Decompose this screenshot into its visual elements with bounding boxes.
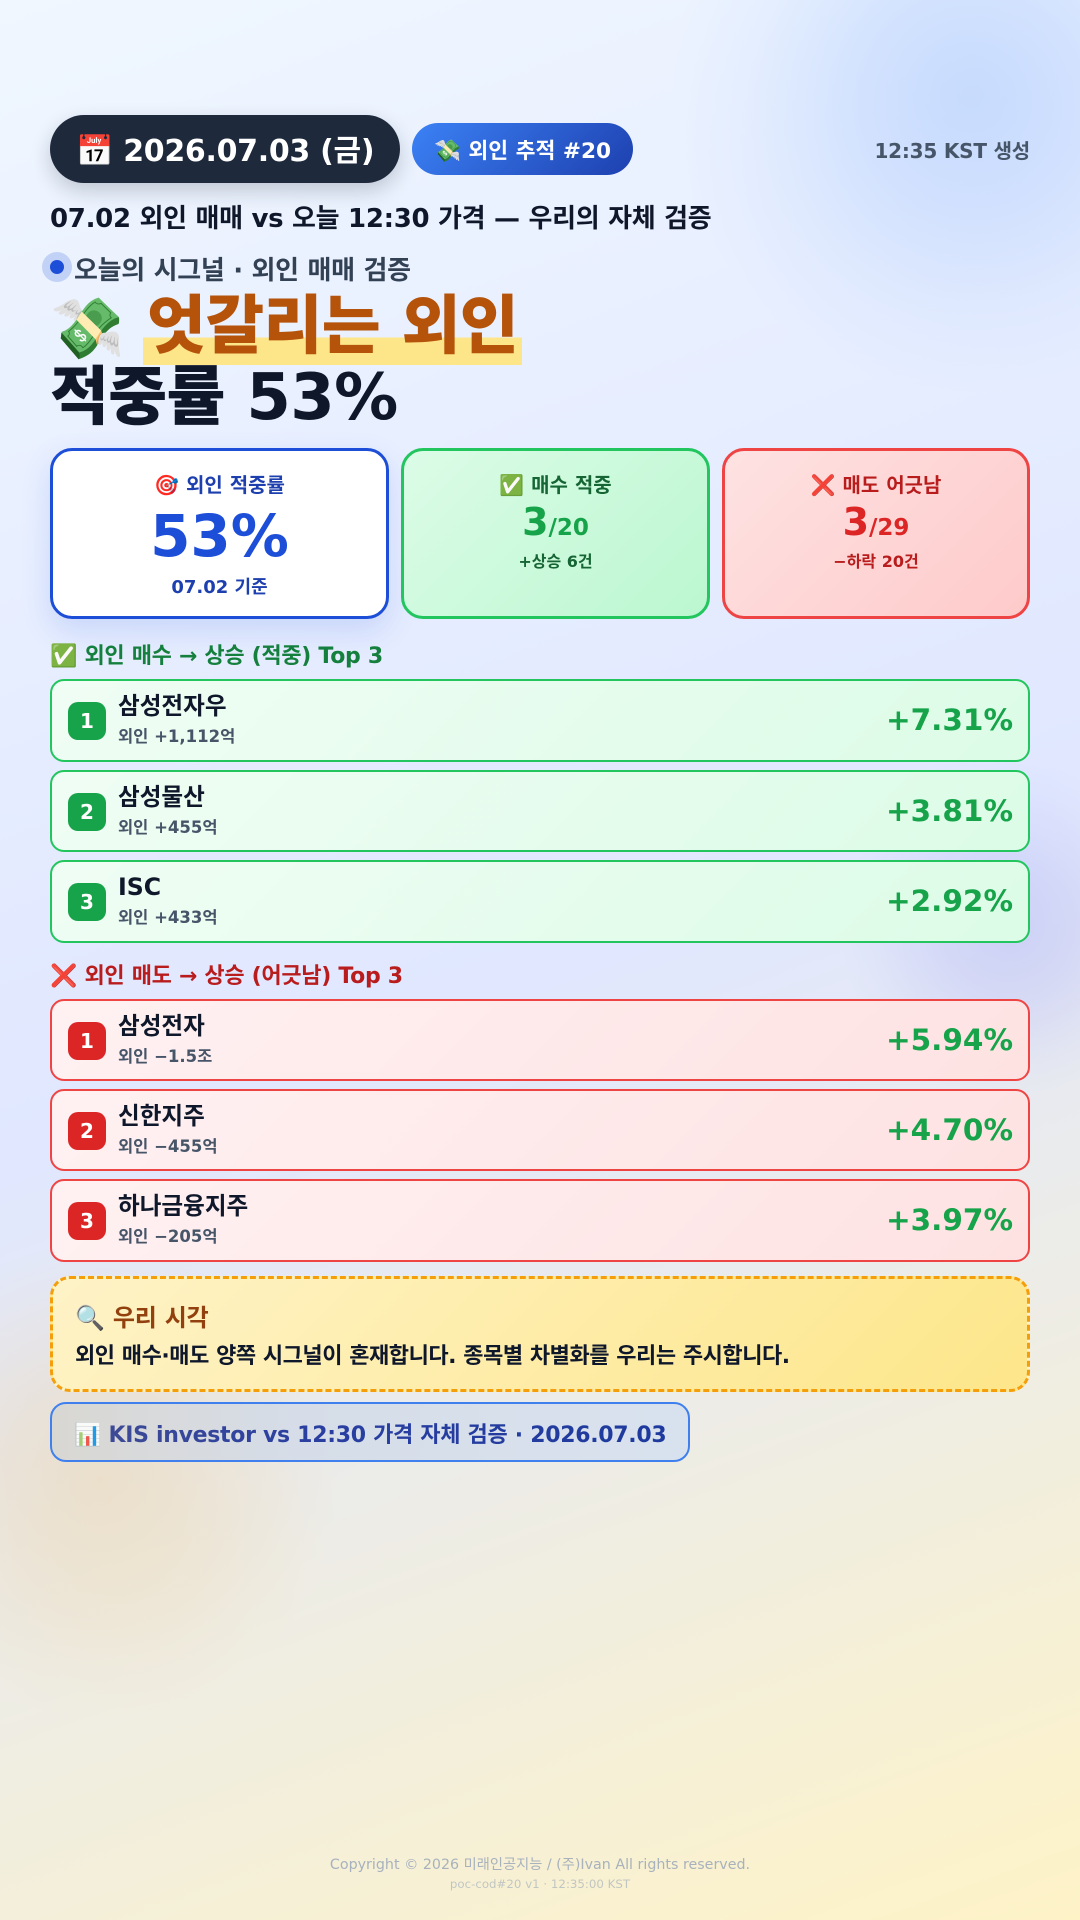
row: buy 3: +2.92%	[886, 884, 1013, 918]
row: sell 3: 3	[80, 1209, 94, 1233]
row: sell 2	[50, 1089, 1030, 1171]
section heading: sell misses: ❌ 외인 매도 → 상승 (어긋남) Top 3	[50, 964, 403, 989]
section heading: buy hits: ✅ 외인 매수 → 상승 (적중) Top 3	[50, 644, 383, 669]
KPI label: 🎯 외인 적중률	[154, 473, 285, 497]
row: buy 1: 1	[80, 709, 94, 733]
row: sell 1: +5.94%	[886, 1023, 1013, 1057]
row: buy 2: 외인 +455억	[118, 818, 218, 837]
build stamp: poc-cod#20 v1 · 12:35:00 KST	[450, 1877, 630, 1891]
KPI: buy hits	[401, 448, 710, 619]
row: buy 2	[50, 770, 1030, 852]
row: sell 2: 2	[80, 1119, 94, 1143]
row: buy 1	[50, 679, 1030, 762]
emoji: 💸	[50, 294, 124, 364]
hit rate line: 적중률 53%	[50, 361, 398, 435]
KPI note: +상승 6건	[518, 552, 593, 571]
KPI: hit rate	[50, 448, 389, 619]
tracking badge: 💸 외인 추적 #20	[434, 139, 611, 164]
KPI: sell misses	[722, 448, 1030, 619]
source badge: 📊 KIS investor vs 12:30 가격 자체 검증 · 2026.07.03	[74, 1423, 666, 1448]
row: sell 1: 외인 −1.5조	[118, 1047, 212, 1066]
row: sell 3: +3.97%	[886, 1203, 1013, 1237]
row: buy 3: ISC	[118, 873, 161, 901]
kicker dot	[50, 260, 64, 274]
headline	[50, 290, 522, 435]
row: sell 3: 외인 −205억	[118, 1227, 218, 1246]
generated time: 12:35 KST 생성	[874, 139, 1030, 163]
row: sell 2: 신한지주	[118, 1102, 205, 1130]
KPI note: 07.02 기준	[171, 577, 268, 598]
KPI value: 3/29	[843, 500, 909, 544]
row: buy 1: 외인 +1,112억	[118, 727, 235, 746]
copyright: Copyright © 2026 미래인공지능 / (주)Ivan All rights reserved.	[330, 1857, 750, 1873]
callout: our view	[50, 1276, 1030, 1392]
row: buy 3: 3	[80, 890, 94, 914]
row: sell 1: 1	[80, 1029, 94, 1053]
tracking badge	[412, 123, 633, 175]
KPI value: 53%	[150, 502, 289, 570]
date pill	[50, 115, 400, 183]
row: buy 2: 삼성물산	[118, 783, 205, 811]
row: buy 3	[50, 860, 1030, 943]
subtitle: 07.02 외인 매매 vs 오늘 12:30 가격 — 우리의 자체 검증	[50, 204, 711, 234]
row: buy 1: +7.31%	[886, 703, 1013, 737]
row: sell 3: 하나금융지주	[118, 1192, 248, 1220]
kicker text: 오늘의 시그널 · 외인 매매 검증	[74, 256, 411, 286]
row: buy 2: +3.81%	[886, 794, 1013, 828]
row: buy 3: 외인 +433억	[118, 908, 218, 927]
row: sell 2: 외인 −455억	[118, 1137, 218, 1156]
row: buy 1: 삼성전자우	[118, 692, 227, 720]
row: sell 3	[50, 1179, 1030, 1262]
kicker	[42, 252, 411, 286]
KPI label: ❌ 매도 어긋남	[811, 473, 941, 497]
callout heading: 🔍 우리 시각	[75, 1304, 209, 1332]
date pill: 📅 2026.07.03 (금)	[76, 134, 374, 169]
KPI value: 3/20	[522, 500, 589, 544]
highlighted phrase: 엇갈리는 외인	[147, 290, 518, 364]
row: sell 2: +4.70%	[886, 1113, 1013, 1147]
source badge	[50, 1402, 690, 1462]
row: sell 1: 삼성전자	[118, 1012, 205, 1040]
row: buy 2: 2	[80, 800, 94, 824]
row: sell 1	[50, 999, 1030, 1081]
callout body: 외인 매수·매도 양쪽 시그널이 혼재합니다. 종목별 차별화를 우리는 주시합니다.	[75, 1344, 790, 1369]
KPI label: ✅ 매수 적중	[499, 473, 612, 497]
KPI note: −하락 20건	[833, 552, 919, 571]
